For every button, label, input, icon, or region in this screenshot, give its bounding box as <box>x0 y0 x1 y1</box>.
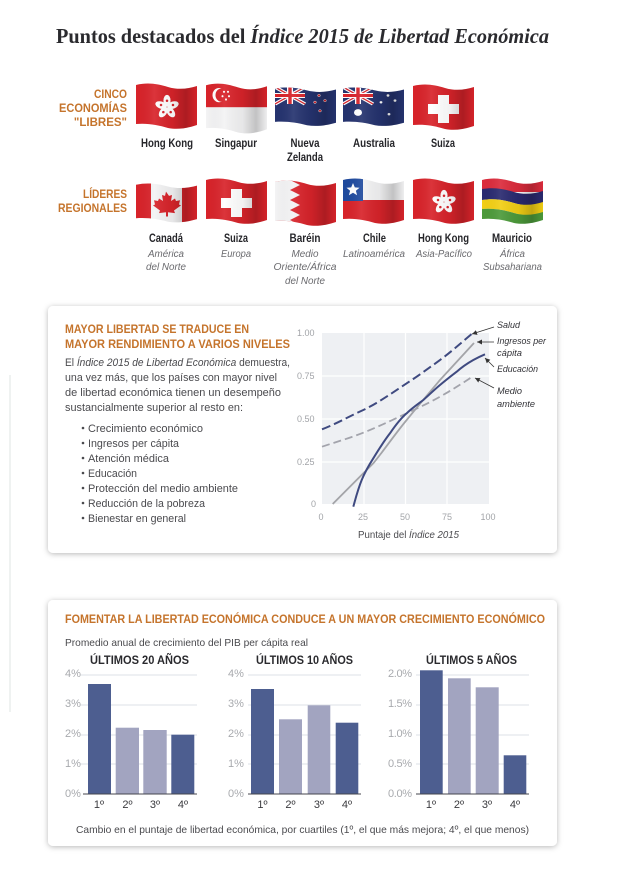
leader names and regions: del Norte <box>146 262 186 273</box>
bar chart: últimos 5 años: 4º <box>510 799 520 811</box>
flag: Mauricio <box>482 178 543 226</box>
x axis labels: 75 <box>442 512 452 522</box>
bullet list: Bienestar en general <box>88 513 186 525</box>
x axis title: Puntaje del Índice 2015 <box>358 528 459 541</box>
leader names and regions: África <box>499 247 525 260</box>
bar chart: últimos 20 años: 0% <box>65 788 81 800</box>
line: ingresos per cápita <box>333 343 474 504</box>
bar chart: últimos 20 años: 4% <box>65 668 81 680</box>
row label: líderes regionales <box>58 188 127 215</box>
y axis labels: 0.75 <box>297 371 315 381</box>
leader names and regions: Asia-Pacífico <box>415 249 472 260</box>
flag: Canadá <box>136 183 197 224</box>
bullet list: Crecimiento económico <box>88 423 203 435</box>
leader names and regions: del Norte <box>285 276 325 287</box>
panel heading: MAYOR LIBERTAD SE TRADUCE EN <box>65 324 249 336</box>
leader names and regions: Mauricio <box>492 231 532 245</box>
country names: Zelanda <box>287 150 323 164</box>
leader names and regions <box>146 231 542 287</box>
intro paragraph: El Índice 2015 de Libertad Económica demuestra, <box>65 356 290 369</box>
bar chart: últimos 10 años: 3º <box>314 799 324 811</box>
bar chart: últimos 5 años: 2.0% <box>388 668 412 680</box>
row label: cinco economías libres: "LIBRES" <box>74 117 127 129</box>
bar chart: últimos 10 años: 3% <box>228 698 244 710</box>
bullet list: Ingresos per cápita <box>88 438 180 450</box>
annotation: medio ambiente: Medio <box>497 386 522 397</box>
annotation: medio ambiente: ambiente <box>497 399 535 410</box>
bar chart: últimos 10 años: 2º <box>285 799 296 811</box>
leader names and regions: América <box>147 249 184 260</box>
country names: Suiza <box>431 136 455 150</box>
flag: Chile <box>343 178 404 226</box>
bar chart: últimos 20 años: ÚLTIMOS 20 AÑOS <box>90 654 189 667</box>
row label: líderes regionales: LÍDERES <box>83 188 127 201</box>
panel: mayor libertad <box>48 306 557 553</box>
bar chart: últimos 20 años: 1% <box>65 758 81 770</box>
y axis labels <box>297 328 316 509</box>
bar chart: últimos 20 años: 3º <box>150 799 160 811</box>
y axis labels: 0.25 <box>297 457 315 467</box>
leader names and regions: Suiza <box>224 231 248 245</box>
bar chart: últimos 5 años: 0.0% <box>388 788 412 800</box>
country names: Singapur <box>215 136 257 150</box>
annotation: ingresos per cápita: cápita <box>497 348 522 359</box>
leader names and regions: Hong Kong <box>418 231 469 245</box>
country names: Australia <box>353 136 395 150</box>
subtitle: Promedio anual de crecimiento del PIB per cápita real <box>65 637 308 649</box>
bar chart: últimos 10 años: 4% <box>228 668 244 680</box>
bar chart: últimos 10 años: ÚLTIMOS 10 AÑOS <box>256 654 353 667</box>
row label: líderes regionales: REGIONALES <box>58 203 127 215</box>
flag: Suiza <box>413 84 474 132</box>
annotation: ingresos per cápita: Ingresos per <box>497 336 547 347</box>
bar chart: últimos 5 años: 1.5% <box>388 698 412 710</box>
annotation: educación <box>485 358 538 375</box>
row label: cinco economías libres: CINCO <box>94 89 127 101</box>
leader names and regions: Baréin <box>290 231 320 245</box>
y axis labels: 1.00 <box>297 328 315 338</box>
bar chart: últimos 5 años: 0.5% <box>388 758 412 770</box>
intro paragraph: sustancialmente superior al resto en: <box>65 402 243 414</box>
leader names and regions: Subsahariana <box>483 262 542 273</box>
x axis labels: 50 <box>400 512 410 522</box>
footnote: Cambio en el puntaje de libertad económica, por cuartiles (1º, el que más mejora; 4º, el que menos) <box>76 824 529 836</box>
leader names and regions: Europa <box>221 249 251 260</box>
panel heading <box>65 324 290 351</box>
bar chart: últimos 20 años: 4º <box>178 799 188 811</box>
flag: Hong Kong <box>136 83 197 131</box>
bar chart: últimos 10 años: 0% <box>228 788 244 800</box>
x axis labels: 100 <box>480 512 496 522</box>
line chart <box>297 320 547 541</box>
leader names and regions: Latinoamérica <box>343 249 405 260</box>
bar chart: últimos 10 años <box>228 654 361 811</box>
annotation: ingresos per cápita <box>477 336 547 359</box>
x axis labels: 25 <box>358 512 368 522</box>
bar chart: últimos 5 años <box>388 654 529 811</box>
title: Puntos destacados del Índice 2015 de Libertad Económica <box>56 24 549 48</box>
x axis labels <box>318 512 496 522</box>
flag: Baréin <box>275 180 336 228</box>
bar chart: últimos 20 años: 2% <box>65 728 81 740</box>
country names: Nueva <box>290 136 320 150</box>
y axis labels: 0.50 <box>297 414 315 424</box>
flag: Suiza <box>206 178 267 226</box>
bar chart: últimos 20 años: 1º <box>94 799 104 811</box>
bullet list: Protección del medio ambiente <box>88 483 238 495</box>
country names: Hong Kong <box>141 136 193 150</box>
leader names and regions: Canadá <box>149 231 183 245</box>
y axis labels: 0 <box>311 499 316 509</box>
bullet list: Educación <box>88 468 137 480</box>
intro paragraph <box>65 356 290 414</box>
bar chart: últimos 10 años: 1º <box>257 799 268 811</box>
leader names and regions: Medio <box>292 249 319 260</box>
bar chart: últimos 10 años: 2% <box>228 728 244 740</box>
bar chart: últimos 5 años: 1.0% <box>388 728 412 740</box>
leader names and regions: Oriente/África <box>274 260 337 273</box>
intro paragraph: una vez más, que los países con mayor nivel <box>65 372 277 384</box>
annotation: educación: Educación <box>497 364 538 375</box>
line: educación <box>353 354 485 507</box>
line: medio ambiente <box>322 376 473 447</box>
section: five free economies <box>59 83 474 164</box>
bullet list: Atención médica <box>88 453 170 465</box>
panel: crecimiento económico <box>48 600 557 846</box>
bar chart: últimos 10 años: 1% <box>228 758 244 770</box>
leader names and regions: Chile <box>363 231 386 245</box>
line: salud <box>322 334 472 429</box>
flag: Singapur <box>206 83 267 136</box>
bar chart: últimos 10 años: 4º <box>342 799 352 811</box>
bar chart: últimos 5 años: 3º <box>482 799 492 811</box>
row label: cinco economías libres <box>59 89 127 129</box>
flag: Australia <box>343 87 404 128</box>
bar chart: últimos 5 años: 2º <box>454 799 464 811</box>
annotation: salud: Salud <box>497 320 521 331</box>
x axis labels: 0 <box>318 512 324 522</box>
bar chart: últimos 20 años: 2º <box>122 799 133 811</box>
bar chart: últimos 5 años: ÚLTIMOS 5 AÑOS <box>426 654 517 667</box>
intro paragraph: de libertad económica tienen un desempeño <box>65 387 281 399</box>
section: regional leaders <box>58 178 543 287</box>
annotation: salud <box>472 320 521 334</box>
bar chart: últimos 5 años: 1º <box>426 799 436 811</box>
annotation: medio ambiente <box>475 378 535 410</box>
panel heading: FOMENTAR LA LIBERTAD ECONÓMICA CONDUCE A UN MAYOR CRECIMIENTO ECONÓMICO <box>65 613 545 626</box>
row label: cinco economías libres: ECONOMÍAS <box>59 102 127 115</box>
bullet list <box>82 423 238 525</box>
bar chart: últimos 20 años: 3% <box>65 698 81 710</box>
bar chart: últimos 20 años <box>65 654 197 811</box>
country names <box>141 136 455 164</box>
panel heading: MAYOR RENDIMIENTO A VARIOS NIVELES <box>65 339 290 351</box>
flag: Hong Kong <box>413 178 474 226</box>
flag: Nueva Zelanda <box>275 87 336 128</box>
bullet list: Reducción de la pobreza <box>88 498 206 510</box>
